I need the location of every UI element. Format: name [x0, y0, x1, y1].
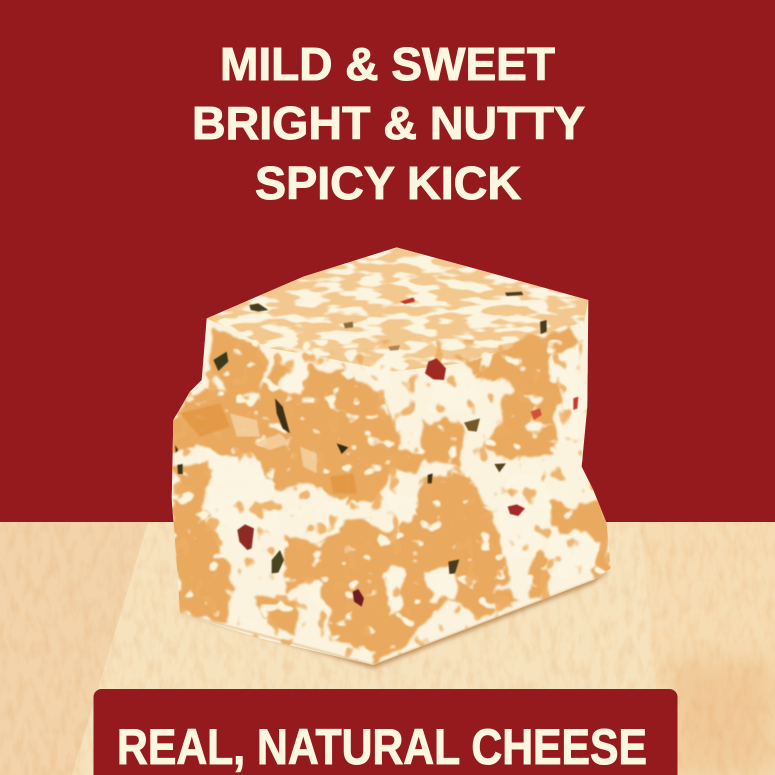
cheese shadow: [180, 570, 610, 668]
heading: flavor descriptors: SPICY KICK: [255, 157, 521, 209]
cheese face edge shading: [180, 580, 593, 665]
top face marbling: [207, 248, 588, 372]
heading: flavor descriptors: BRIGHT & NUTTY: [192, 97, 585, 149]
heading: flavor descriptors: [192, 38, 585, 209]
torn edge dark orange: [180, 403, 357, 493]
mottled breakup of the marbling: [172, 340, 606, 652]
badge: real, natural cheese: REAL, NATURAL CHEESE: [117, 719, 647, 775]
wooden table surface: [0, 522, 775, 775]
pepper flecks: [175, 292, 578, 607]
heading: flavor descriptors: MILD & SWEET: [220, 38, 555, 90]
badge: real, natural cheese: [94, 689, 678, 775]
side face marbling: [170, 327, 610, 663]
cream patches over orange: [207, 340, 600, 610]
torn edge highlights: [230, 413, 317, 473]
cheese body: [160, 240, 627, 673]
cheese cube with pepper flecks: [160, 240, 627, 673]
red background: [0, 0, 775, 522]
